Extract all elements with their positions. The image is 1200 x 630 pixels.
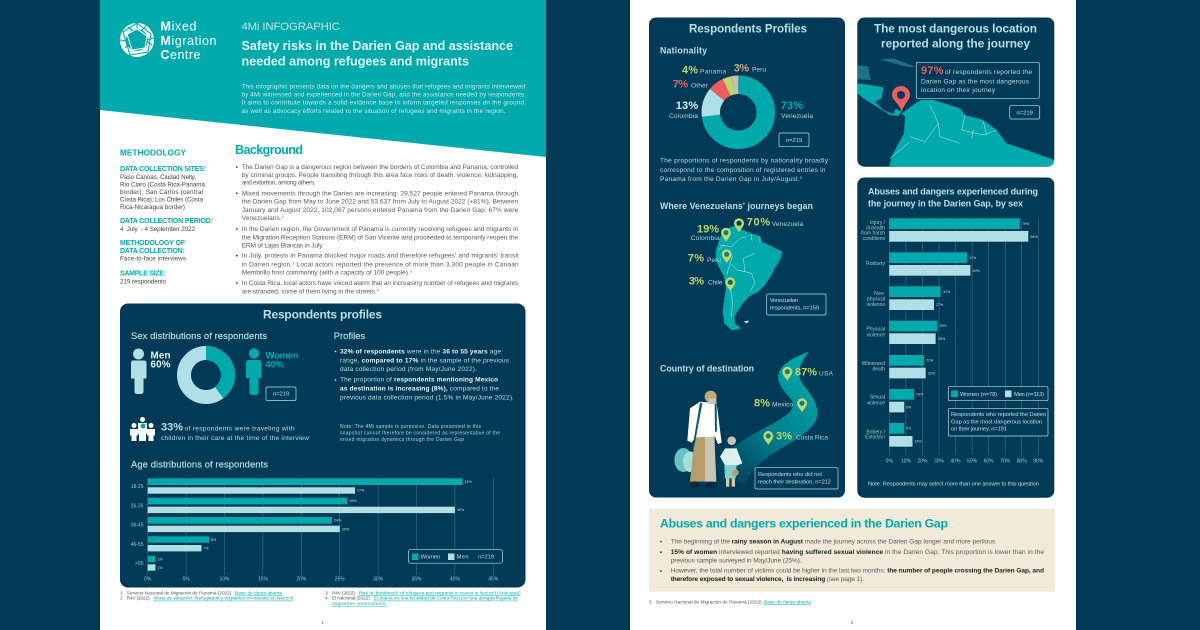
pin: Darien Gap [892,86,910,112]
sample box [767,294,826,315]
category labels: Physical [866,326,885,332]
profiles text: range, compared to 17% in the sample of the previous [340,357,510,364]
axis labels: 0% [886,458,893,464]
category labels: Extortion [865,435,885,441]
respondents box: on their journey, n=191 [951,427,1007,433]
category labels: death [872,367,885,373]
value labels: 21% [926,358,934,362]
respondents box: Respondents who did not [758,472,822,478]
background section: Local actors reported the presence of more than 3,300 people in Canaan [295,261,519,268]
background section: Membrillo host community (with a capacity of 100 people). [242,270,410,277]
legend: Men [456,555,468,561]
nationality labels: 3% [734,63,749,75]
methodology sidebar: DATA COLLECTION PERIOD: [120,218,213,225]
nationality section [660,46,829,183]
nationality text: correspond to the composition of registered entries in [660,167,826,174]
age labels: >55 [135,561,144,567]
nationality text: Panama from the Darien Gap in July/August. [660,176,800,183]
age labels: 36-45 [131,522,144,528]
sample size box: n=219 [786,138,802,144]
donut: nationality [711,85,766,140]
methodology sidebar: Rica-Nicaragua border) [120,204,185,211]
axis labels: 30% [934,458,945,464]
methodology sidebar [120,148,213,285]
nationality labels: Panama [700,68,726,75]
category labels: Injury / [870,220,886,226]
heading: Abuses and dangers experienced in the Darien Gap [660,517,948,531]
panel title: the journey in the Darien Gap, by sex [868,199,1023,209]
axis labels: 80% [1017,458,1027,464]
pin: Peru [722,249,732,263]
callout: 97% [921,65,944,77]
icon: woman [246,348,262,395]
page number 2: 2 [851,620,854,625]
intro text: as well as advocacy efforts related to the situation of refugees and migrants in the region. [242,108,506,115]
footnotes page 1: El Nacional (2022). [332,596,371,602]
bullets: previous sample surveyed in May/June (25%). [671,557,802,564]
nationality labels: Colombia [669,113,698,120]
footnotes page 1: 3 [325,590,328,596]
axis labels: 0% [144,576,152,582]
pin: USA [782,367,792,381]
axis labels: 45% [488,576,499,582]
legend [948,387,1048,401]
background section [235,143,519,295]
background section: 3 [410,270,412,274]
age labels [131,484,144,567]
women label: 40% [266,360,285,370]
profiles text: 32% of respondents were in the 36 to 55 years age [340,348,501,355]
men label: 60% [150,360,171,371]
destination labels: 87% [795,366,817,378]
footnotes page 1: 4 [325,596,328,602]
panel: respondents profiles by nationality, journey and destination [649,18,845,498]
category labels: Sexual [870,395,885,401]
background section: 4 [377,288,379,292]
value labels: 7% [204,546,209,550]
origin labels: 7% [688,253,704,265]
pin: Chile [725,277,735,291]
destination labels [754,366,834,442]
note [340,424,500,443]
axis labels: 50% [967,458,978,464]
profiles text: The proportion of respondents mentioning Mexico [340,377,498,384]
respondents box [755,468,838,489]
women label: Women [266,351,299,361]
nationality section: Nationality [660,46,707,56]
header band [100,0,546,157]
destination labels: 8% [754,398,770,410]
page number 1: 1 [321,620,324,625]
category labels: violence [867,401,885,407]
intro text: This infographic presents data on the dangers and abuses that refugees and migrants interviewed [242,83,525,90]
background section: Venezuelans. [242,215,282,222]
origin labels [688,217,804,287]
panel title: reported along the journey [881,36,1030,50]
category labels: Non- [874,291,885,297]
category labels: ill-health [866,226,885,232]
axis labels: 20% [296,576,307,582]
panel title: Respondents Profiles [689,22,807,35]
destination labels: Mexico [772,402,793,409]
bullets: 15% of women interviewed reported having suffered sexual violence in the Darien Gap. This proportion is lower than in the [671,549,1044,556]
kicker: 4Mi INFOGRAPHIC [242,21,340,33]
panel title: Respondents profiles [263,308,382,322]
intro text: by 4Mi witnessed and experienced in the Darien Gap, and the assistance needed by respondents. [242,92,526,98]
footnotes page 1: Risk of ‘bottleneck’ of refugees and migrants in transit in Necoclí (Antioquia) [359,590,521,596]
age labels: 46-55 [131,542,144,548]
title: needed among refugees and migrants [242,54,469,68]
panel: respondents profiles [120,304,526,588]
methodology sidebar: SAMPLE SIZE: [120,270,166,278]
legend: Women [421,555,440,561]
value labels: 27% [357,488,365,492]
bullets: therefore exposed to sexual violence, is increasing (see page 1). [671,576,864,583]
methodology sidebar: Paso Canoas, Ciudad Nelly, [120,174,196,181]
sample size box [266,387,296,400]
men bars [148,487,455,571]
background section: In the Darien region, the Government of Panama is currently receiving refugees and migrants in [242,226,519,233]
axis labels [144,576,499,582]
donut: men and women [184,353,228,397]
chart note: Note: Respondents may select more than one answer to this question [868,482,1039,488]
legend: n=219 [478,555,494,561]
sample box: respondents, n=159 [770,305,819,311]
nationality labels: Peru [752,67,766,74]
value labels: 27% [936,303,944,307]
page 1 [100,0,546,630]
axis labels: 20% [917,458,928,464]
footnotes page 1: Servicio Nacional de Migración de Panamá (2022). [127,590,233,596]
value labels: 24% [334,518,342,522]
note: mixed migration dynamics through the Darien Gap [340,437,464,443]
category labels [861,220,886,441]
destination section [660,352,838,489]
axis labels: 60% [984,458,994,464]
women bars [148,478,463,562]
panel title [874,22,1037,50]
footnotes page 1: El drama en una localidad de Costa Rica por una abrupta llegada de [374,596,518,602]
logo: Mixed [160,20,197,34]
children stat: children in their care at the time of the interview [161,435,309,442]
legend: Men (n=113) [1014,392,1044,398]
sex distribution [131,330,299,400]
methodology sidebar: border); San Carlos (central [120,189,203,196]
background section: 2 [292,261,294,265]
background section: In July, protests in Panama blocked major roads and therefore refugees' and migrants' transit [242,253,519,260]
destination labels: Costa Rica [796,434,828,441]
title: Safety risks in the Darien Gap and assistance [242,39,513,53]
background section: ERM of Lajas Blancas in July. [242,243,324,250]
footnote page 2: 5 [649,599,652,605]
women label [266,351,299,370]
intro text: It aims to contribute towards a solid evidence base to inform targeted responses on the ground, [242,100,526,107]
footnotes page 1: 1 [120,590,123,596]
origin labels: 70% [747,217,770,229]
men label [150,351,171,371]
origin labels: Colombia [691,235,720,242]
footnote page 2: Servicio Nacional de Migración de Panamá (2022). [656,599,763,605]
destination labels: 3% [776,430,792,442]
icon: man [131,348,146,394]
origin labels: Venezuela [772,221,804,228]
chart: abuses by sex [861,218,1048,464]
origin labels: Chile [708,279,723,286]
axis labels: 25% [335,576,345,582]
background section: Mixed movements through the Darien are increasing: 29,527 people entered Panama through [242,190,519,198]
background section: In Costa Rica, local actors have voiced alarm that an increasing number of refugees and migrants [242,280,519,287]
bullets [660,538,1044,583]
bullets: However, the total number of victims could be higher in the last two months: the number of people crossing the Darien Gap, and [671,568,1044,575]
panel title: Abuses and dangers experienced during [868,186,1038,196]
logo: Centre [160,48,201,62]
value labels: 49% [972,269,980,273]
methodology sidebar: Face-to-face interviews [120,256,186,263]
panel: abuses and dangers by sex [857,178,1054,498]
value labels: 9% [906,406,912,410]
sample size box [779,133,809,147]
nationality labels: 13% [676,100,698,112]
axis labels: 70% [1000,458,1011,464]
axis labels: 40% [450,576,460,582]
value labels: 47% [969,256,977,260]
category labels: conditions [862,236,885,242]
value labels: 25% [342,528,350,532]
value labels: 8% [211,538,217,542]
respondents box: Gap as the most dangerous location [951,419,1042,425]
title [242,39,513,68]
logo [120,20,217,62]
background section: the Darien Gap from May to June 2022 and 53,637 from July to August 2022 (+81%). Between [242,199,519,206]
category labels: violence [867,302,885,308]
value labels: 9% [906,426,912,430]
value labels: 14% [914,440,922,444]
background section: and extortion, among others. [242,180,316,186]
legend [408,550,502,563]
profiles text: data collection period (from May/June 2022). [340,366,477,373]
value labels: 22% [928,372,936,376]
respondents box [948,408,1048,436]
origin labels: 19% [697,223,719,235]
value labels: 40% [457,508,465,512]
axis labels: 10% [219,576,230,582]
value labels [158,480,472,570]
nationality labels: 4% [682,64,698,76]
logo: Migration [160,34,217,48]
value labels: 28% [938,337,946,341]
methodology sidebar: Costa Rica); Los Chiles (Costa [120,196,203,203]
background section: the Migration Reception Stations (ERM) of San Vicente and proceeded to temporarily reopen the [242,234,519,241]
callout: of respondents reported the [945,69,1032,76]
sample size box: n=219 [1017,110,1033,116]
axis labels: 5% [182,576,190,582]
profiles text: Profiles [334,330,366,341]
panel title: The most dangerous location [874,22,1037,36]
value labels: 26% [350,499,357,503]
axis labels: 30% [373,576,384,582]
value labels: 1% [158,566,163,570]
page 2 [630,0,1076,630]
chart: age distributions: Age distributions of respondents [131,459,268,470]
sample box: Venezuelan [770,298,798,304]
origin labels: Peru [707,257,721,264]
value labels: 41% [464,480,472,484]
methodology sidebar: 4 July - 4 September 2022 [120,226,195,233]
value labels: 84% [1030,235,1038,239]
note: snapshot cannot therefore be considered as representative of the [340,430,500,436]
destination labels: USA [819,370,834,377]
nationality labels: 73% [781,100,803,112]
age labels: 26-35 [131,504,144,510]
background section: 1 [282,215,284,219]
children stat: of respondents were traveling with [184,426,295,433]
category labels: physical [867,296,885,302]
methodology sidebar: METHODOLOGY [120,148,187,158]
callout: location on their journey [921,87,996,94]
nationality text: The proportions of respondents by nationality broadly [660,158,829,165]
nationality labels: Other [691,83,709,90]
note: Note: The 4Mi sample is purposive. Data presented in this [340,424,482,430]
methodology sidebar: Rio Claro (Costa Rica-Panama [120,181,205,188]
men bars [889,231,1028,447]
axis labels: 40% [950,458,961,464]
footnotes page 1: R4V (2022). [127,596,151,602]
nationality labels [669,63,813,120]
men label: Men [150,351,171,362]
footnotes page 1: R4V (2022). [332,590,356,596]
nationality labels: Venezuela [781,113,813,120]
category labels: from harsh [861,231,885,237]
road illustration [713,352,817,483]
profiles text: previous data collection period (1.5% in May/June 2022). [340,395,514,402]
panel: abuses and dangers text [649,509,1055,592]
value labels [906,222,1038,444]
bullets: The beginning of the rainy season in August made the journey across the Darien Gap longer and more perilous. [671,538,997,545]
nationality text: 5 [800,176,802,180]
background section: The Darien Gap is a dangerous region between the borders of Colombia and Panama, controlled [242,164,519,171]
sample size box: n=219 [273,392,289,398]
value labels: 1% [158,558,163,562]
background section: Background [235,143,303,157]
origin labels: 3% [689,275,704,287]
methodology sidebar: DATA COLLECTION SITES: [120,166,206,173]
footnotes page 1: Base de datos abierta [235,590,282,596]
callout: Darien Gap as the most dangerous [921,78,1030,85]
legend: Women (n=78) [960,392,997,398]
illustration: adult and child [674,391,742,489]
journeys section [660,201,826,330]
map: South America [716,226,782,330]
value labels: 79% [1022,222,1030,226]
methodology sidebar: METHODOLOGY OF [120,240,186,247]
respondents box: reach their destination, n=212 [758,479,831,485]
background section: by criminal groups. People transiting through this area face risks of death, violence, kidnapping, [242,172,518,179]
sex distribution: Sex distributions of respondents [131,330,267,341]
profiles text: as destination is increasing (8%), compared to the [340,386,499,393]
axis labels: 90% [1033,458,1044,464]
nationality text [660,158,829,183]
value labels: 29% [940,324,947,328]
methodology sidebar: DATA COLLECTION: [120,248,185,255]
callout [916,62,1039,98]
pin: Mexico [797,398,807,412]
children stat [161,422,309,442]
pin: Colombia [721,228,731,242]
footnote page 2: Base de datos abierta [764,599,811,605]
background section: in Darien region. [242,261,292,268]
category labels: violence [867,332,885,338]
background section: January and August 2022, 102,067 persons entered Panama from the Darien Gap. 67% were [242,207,519,214]
category labels: Bribery / [866,429,886,435]
value labels: 31% [943,290,951,294]
pin: Costa Rica [763,431,773,445]
methodology sidebar: 219 respondents [120,278,166,285]
panel: most dangerous location [857,18,1054,167]
map: Central and northern South America [857,58,1054,167]
sample size box [1010,106,1040,119]
footnotes page 1: Alerta de situación: Refugiados y migrantes en tránsito en Necoclí [153,596,294,602]
background section: are stranded, some of them living in the streets. [242,288,377,295]
nationality labels: 7% [673,79,688,91]
footnotes page 1 [120,590,521,607]
axis labels: 10% [901,458,911,464]
axis labels: 35% [411,576,422,582]
women bars [889,218,1020,434]
icon: family [130,417,155,441]
value labels: 15% [916,392,924,396]
chart: age distributions [131,459,502,582]
pin: Venezuela [734,218,744,232]
category labels: Robbery [866,261,885,267]
footnotes page 1: 2 [120,596,123,602]
age labels: 18-25 [131,484,144,490]
destination section: Country of destination [660,363,754,373]
axis labels: 15% [258,576,268,582]
respondents box: Respondents who reported the Darien [951,412,1046,418]
panel title [868,186,1038,209]
children stat: 33% [161,422,183,434]
footnotes page 1: migrantes venezolanos. [332,601,387,607]
journeys section: Where Venezuelans' journeys began [660,201,813,211]
axis labels [886,458,1044,464]
category labels: Witnessed [862,361,885,367]
profiles text [334,330,514,402]
footnote page 2 [649,599,811,605]
intro text [242,83,526,115]
